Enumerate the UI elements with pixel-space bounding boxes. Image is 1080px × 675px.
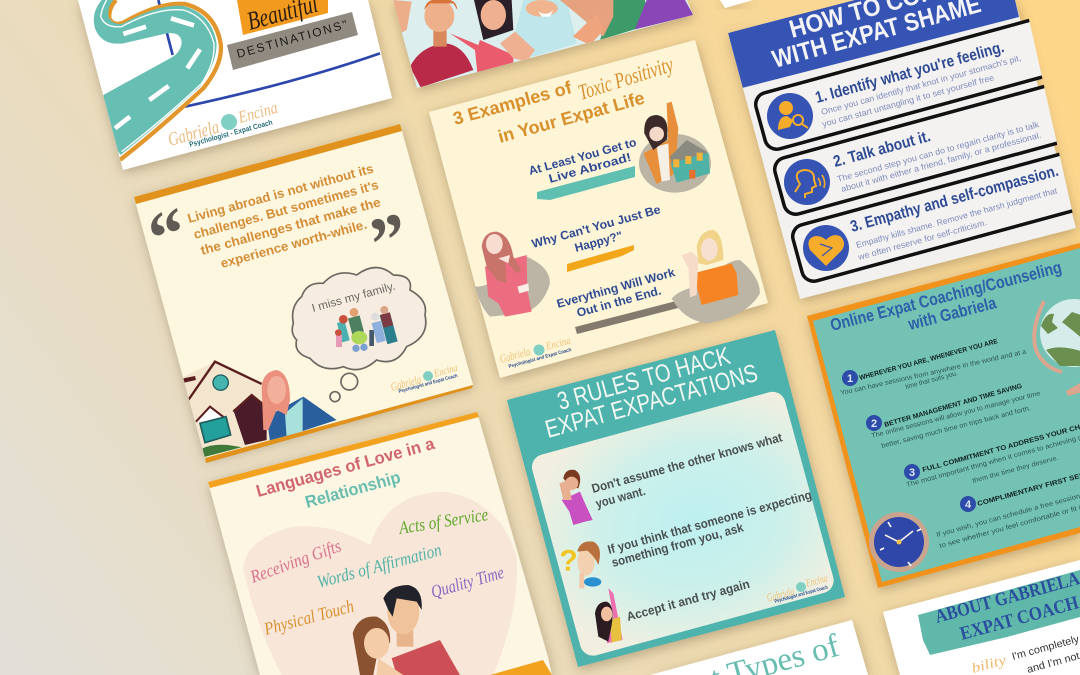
logo: Gabriela — [498, 344, 532, 366]
logo: Psychologist and Expat Coach — [508, 347, 572, 370]
orange top strip — [208, 412, 479, 488]
heart — [243, 492, 517, 675]
illustration: woman in orange — [672, 230, 760, 323]
panel: expat expectations card — [507, 330, 845, 667]
row 3: Empathy kills shame. Remove the harsh judgment that — [855, 185, 1059, 250]
panel: quote card — [134, 124, 473, 463]
illustration: confused man with question mark — [559, 541, 601, 588]
row 2: about it with either a friend, family, or a professional. — [840, 130, 1042, 194]
body text — [1011, 633, 1080, 675]
logo: Gabriela — [389, 372, 423, 394]
example 2: Why Can't You Just Be — [530, 202, 662, 251]
step 1: You can have sessions from anywhere in the world and at a — [840, 349, 1027, 397]
logo: Psychologist - Expat Coach — [188, 117, 274, 149]
icon: speaking head — [784, 159, 830, 205]
love languages: Physical Touch — [261, 596, 356, 639]
icon: person with magnifier — [767, 93, 813, 139]
icon: heart handshake — [803, 225, 849, 271]
example 1: At Least You Get to — [527, 135, 638, 178]
illustration: couple — [353, 585, 460, 675]
example 2: Happy?" — [573, 228, 624, 255]
logo — [765, 572, 829, 605]
orange label — [237, 0, 328, 35]
quote text: the challenges that make the — [199, 194, 382, 258]
icon: closing quote mark: ” — [362, 197, 418, 283]
illustration: woman reaching up — [595, 588, 623, 643]
illustration: woman with hand raised — [559, 470, 593, 525]
illustration: globe — [1034, 299, 1080, 396]
panel: online coaching card — [807, 243, 1080, 588]
illustration: group of friends waving — [393, 0, 693, 87]
title: in Your Expat Life — [496, 88, 647, 147]
step 4 — [936, 467, 1080, 550]
illustration: woman with house — [639, 102, 711, 193]
row 2: 2. Talk about it. — [832, 128, 933, 171]
logo: Encina — [235, 98, 280, 127]
rule 2: If you think that someone is expecting — [606, 488, 813, 557]
logo — [498, 335, 572, 370]
love languages — [247, 504, 506, 639]
example 1: Live Abroad! — [547, 150, 633, 186]
panel: expat shame card — [728, 0, 1080, 299]
panel: toxic positivity card — [429, 40, 768, 378]
step 1: 1 — [847, 373, 853, 385]
row 2: The second step you can do to regain clarity is to talk — [836, 119, 1041, 184]
thought text: I miss my family. — [311, 281, 397, 315]
logo: Encina — [804, 572, 829, 590]
logo: Gabriela — [765, 584, 796, 605]
row 1: you can start untangling it to set yourself free — [821, 72, 995, 129]
body text: I'm completely — [1011, 633, 1080, 663]
title: 3 RULES TO HACK — [554, 342, 734, 416]
icon: opening quote mark: “ — [140, 192, 196, 278]
illustration: clock — [869, 512, 929, 572]
title: Languages of Love in a — [254, 434, 437, 501]
row 2 — [772, 84, 1058, 216]
panel: types card — [650, 620, 868, 675]
logo: Encina — [432, 362, 459, 380]
panel: people card — [393, 0, 693, 88]
title — [451, 51, 676, 147]
header band — [728, 0, 1019, 88]
grey brush stroke — [575, 300, 682, 334]
title: Toxic Positivity — [575, 51, 676, 105]
road illustration — [94, 0, 380, 160]
rule 3: Accept it and try again — [625, 577, 751, 624]
panel: about gabriela card — [883, 560, 1080, 675]
love languages: Receiving Gifts — [247, 535, 344, 587]
teal brush stroke — [537, 166, 635, 200]
step 2: better, saving much time on trips back and forth. — [881, 405, 1032, 450]
rule 1: Don't assume the other knows what — [590, 430, 785, 496]
illustration: woman in pink — [475, 232, 550, 317]
logo — [389, 362, 459, 395]
orange strips — [134, 124, 473, 463]
teal brush banner — [918, 570, 1080, 655]
row 1: 1. Identify what you're feeling. — [814, 39, 1006, 107]
step 2: BETTER MANAGEMENT AND TIME SAVING — [884, 383, 1023, 429]
row 1: Once you can identify that knot in your stomach's pit, — [820, 53, 1022, 117]
panel: small white card top — [720, 0, 753, 8]
step 2 — [866, 383, 1041, 450]
love languages: Words of Affirmation — [315, 539, 444, 592]
example 3: Out in the End. — [575, 283, 663, 320]
title: 3 Examples of — [451, 77, 575, 129]
rule 2: something from you, ask — [610, 520, 745, 570]
step 1: time that suits you. — [905, 370, 959, 391]
title: with Gabriela — [905, 293, 999, 334]
love languages: Quality Time — [429, 562, 506, 602]
orange bottom strip — [490, 660, 552, 675]
quote text: experience worth-while. — [219, 217, 368, 271]
step 1: WHEREVER YOU ARE, WHENEVER YOU ARE — [859, 338, 999, 382]
panel: road card — [78, 0, 392, 170]
panel: languages of love card: Relationship — [303, 468, 403, 512]
title: EXPAT EXPACTATIONS — [542, 359, 761, 444]
logo — [166, 98, 280, 151]
step 4: 4 — [965, 499, 972, 511]
step 2: 2 — [871, 418, 877, 430]
yellow brush stroke — [567, 245, 634, 272]
love languages: Acts of Service — [397, 504, 490, 538]
row 1 — [754, 18, 1042, 151]
illustration: house and woman — [170, 362, 337, 457]
step 3: them the time they deserve. — [972, 455, 1059, 485]
content panel — [529, 389, 837, 659]
quote text: Living abroad is not without its — [186, 161, 375, 226]
logo: Psychologist and Expat Coach — [774, 585, 829, 605]
logo: Psychologist and Expat Coach — [398, 373, 458, 395]
step 3: 3 — [909, 467, 915, 479]
destinations label: DESTINATIONS" — [235, 17, 349, 61]
step 2: The online sessions will allow you to manage your time — [871, 390, 1041, 440]
row 3 — [790, 146, 1080, 284]
illustration: family — [335, 306, 398, 352]
thought bubble — [292, 267, 426, 402]
quote text — [186, 161, 382, 271]
panel: languages of love card — [208, 412, 552, 675]
rule 1: you want. — [594, 484, 647, 511]
illustration: confused man with question mark: ? — [559, 545, 578, 578]
quote text: challenges. But sometimes it's — [192, 177, 380, 242]
row 3: we often reserve for self-criticism. — [856, 217, 988, 262]
example 3: Everything Will Work — [555, 265, 677, 311]
logo: Encina — [544, 335, 572, 353]
grey label — [227, 12, 358, 70]
logo: Gabriela — [166, 117, 221, 151]
